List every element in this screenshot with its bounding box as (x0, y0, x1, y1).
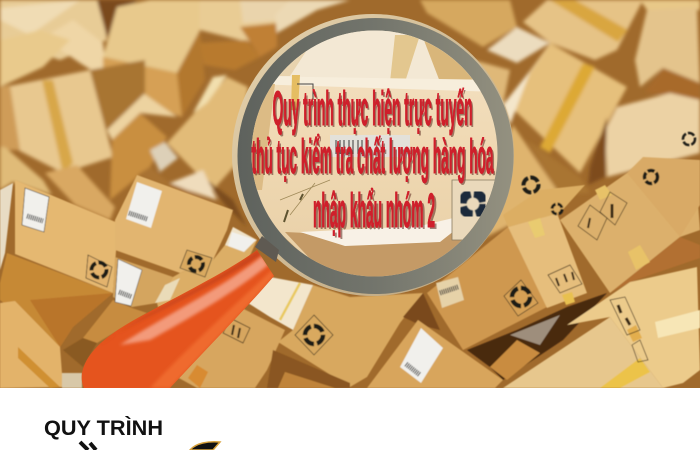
magnifier ferrule (255, 236, 279, 262)
magnified box detail inside lens (250, 30, 500, 280)
lens metal ring (238, 18, 514, 294)
shipping labels (22, 182, 464, 383)
recycle marks (86, 133, 695, 355)
cropped mark below heading (80, 442, 96, 450)
lower heading: QUY TRÌNH: QUY TRÌNH (44, 417, 163, 440)
magnifying glass (70, 14, 514, 395)
lens outer halo (232, 14, 514, 296)
title text (252, 83, 495, 240)
lens glass (252, 30, 498, 276)
recycle icon in lens (462, 193, 484, 215)
magnifier handle (82, 250, 274, 388)
sharp boxes, lower area (0, 133, 700, 388)
handling marks (223, 192, 648, 362)
blurred boxes, upper area (0, 0, 350, 227)
cropped logo shape (190, 442, 220, 450)
